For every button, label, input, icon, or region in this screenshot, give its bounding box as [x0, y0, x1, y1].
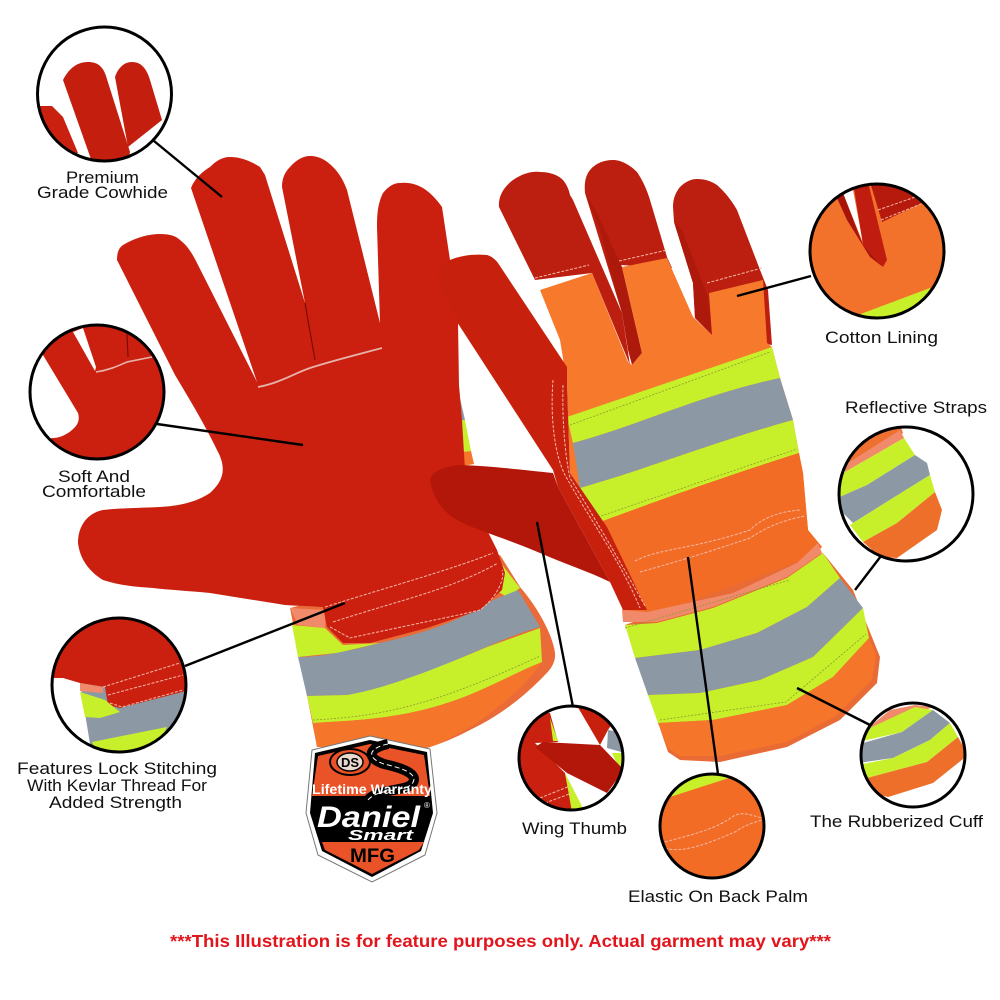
wing thumb: [430, 465, 610, 582]
icon: DS oval: DS: [341, 755, 359, 770]
logo: Daniel Smart lifetime warranty shield: MFG: [350, 846, 395, 867]
label: Soft And: [58, 467, 130, 486]
label: Features Lock Stitching: [17, 759, 217, 778]
callout: wing thumb: [515, 522, 627, 838]
elastic stitching: [635, 510, 800, 561]
label: Cotton Lining: [825, 328, 938, 347]
label: With Kevlar Thread For: [27, 776, 207, 795]
label: Added Strength: [49, 793, 182, 812]
body: [540, 258, 822, 622]
logo: Daniel Smart lifetime warranty shield: ®: [424, 801, 430, 810]
label: [17, 759, 217, 812]
logo: Daniel Smart lifetime warranty shield: Lifetime Warranty: [312, 781, 432, 797]
red finger and seam strip: [437, 255, 647, 610]
callout: premium grade cowhide: [30, 27, 222, 202]
label: Comfortable: [42, 482, 146, 501]
cuff: [625, 553, 880, 762]
icon: winding road: [368, 744, 414, 800]
footer disclaimer: ***This Illustration is for feature purposes only. Actual garment may vary***: [170, 931, 831, 951]
callout: soft and comfortable: [25, 320, 303, 501]
label: Reflective Straps: [845, 398, 987, 417]
label: Grade Cowhide: [37, 183, 168, 202]
logo: Daniel Smart lifetime warranty shield: [306, 736, 437, 882]
left glove: side straps visible behind palm: [457, 385, 474, 466]
logo: Daniel Smart lifetime warranty shield: Daniel: [317, 801, 421, 834]
logo: Daniel Smart lifetime warranty shield: Smart: [348, 827, 415, 844]
callout: lock stitching: [17, 603, 345, 812]
callout: elastic on back palm: [628, 557, 808, 906]
callout: cotton lining: [737, 180, 950, 347]
label: [42, 467, 146, 501]
right glove: orange back with reflective bands: [430, 160, 880, 762]
fingers and red finger tips: [499, 172, 630, 365]
left glove: reflective cuff: [290, 385, 555, 748]
callout: rubberized cuff: [797, 688, 983, 831]
label: [37, 168, 168, 202]
callout: reflective straps: [835, 398, 987, 590]
label: Premium: [66, 168, 139, 187]
label: Wing Thumb: [522, 819, 627, 838]
icon: DS oval: [330, 749, 370, 775]
left glove: red suede palm: [78, 156, 505, 643]
label: The Rubberized Cuff: [810, 812, 983, 831]
label: Elastic On Back Palm: [628, 887, 808, 906]
